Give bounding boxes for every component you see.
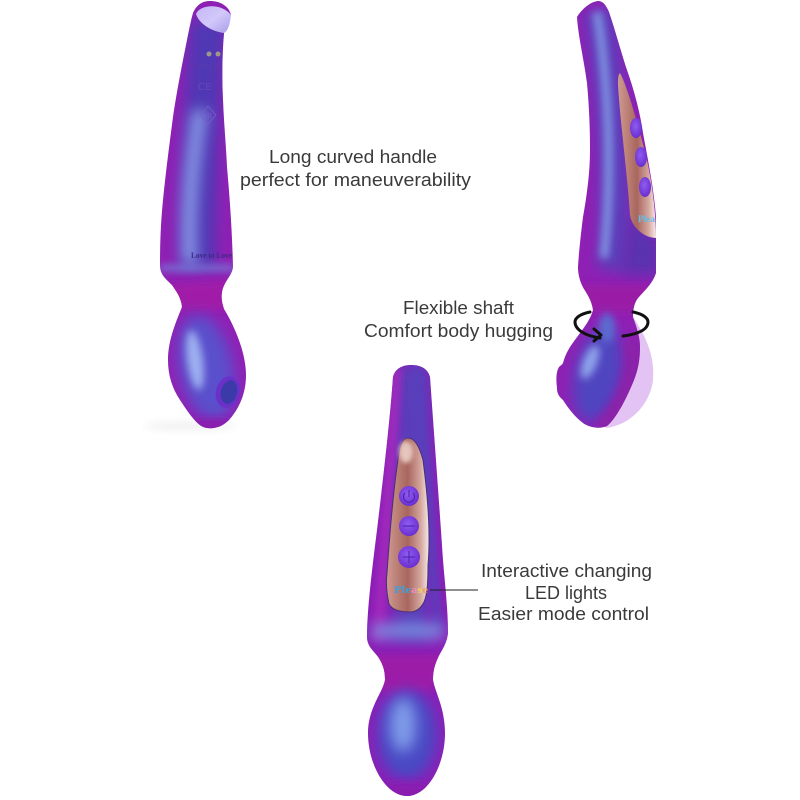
- model text: SW—03: [197, 63, 222, 71]
- power button: [399, 486, 419, 506]
- charging contacts: [206, 52, 220, 56]
- caption: LED lights: LED lights: [525, 583, 607, 603]
- suction hole: [212, 373, 244, 411]
- caption: flexible shaft: [364, 298, 553, 341]
- motion ghost of head: [590, 317, 653, 428]
- caption: handle: Long curved handle: [269, 147, 437, 167]
- caption: handle: [240, 147, 471, 190]
- diamond mark: [200, 106, 216, 124]
- caption: LED lights: [478, 561, 652, 624]
- diamond mark: III: [205, 112, 213, 120]
- caption: LED lights: Easier mode control: [478, 604, 649, 624]
- caption: handle: perfect for maneuverability: [240, 170, 471, 190]
- ground shadow under left wand: [144, 422, 236, 430]
- plus button: [398, 546, 420, 568]
- control panel side: [618, 73, 656, 238]
- button: [635, 147, 647, 167]
- panel highlight: [399, 441, 413, 463]
- panel logo: Ple ase: [394, 585, 429, 596]
- callout line: [430, 589, 478, 591]
- caption: flexible shaft: Comfort body hugging: [364, 321, 553, 341]
- brand text: Love to Love: [191, 251, 232, 260]
- minus button: [399, 516, 419, 536]
- button: [639, 177, 651, 197]
- certification mark: CE: [198, 82, 212, 93]
- wand: side view right: [556, 1, 656, 428]
- end cap: [196, 6, 231, 33]
- control panel: [386, 438, 429, 612]
- wand: rear view left: [160, 1, 246, 429]
- wand: front view bottom: [367, 365, 448, 796]
- button: [630, 118, 642, 138]
- panel logo: Plea: [638, 214, 656, 224]
- rotation arrow: [575, 312, 648, 341]
- caption: LED lights: Interactive changing: [481, 561, 652, 581]
- caption: flexible shaft: Flexible shaft: [403, 298, 514, 318]
